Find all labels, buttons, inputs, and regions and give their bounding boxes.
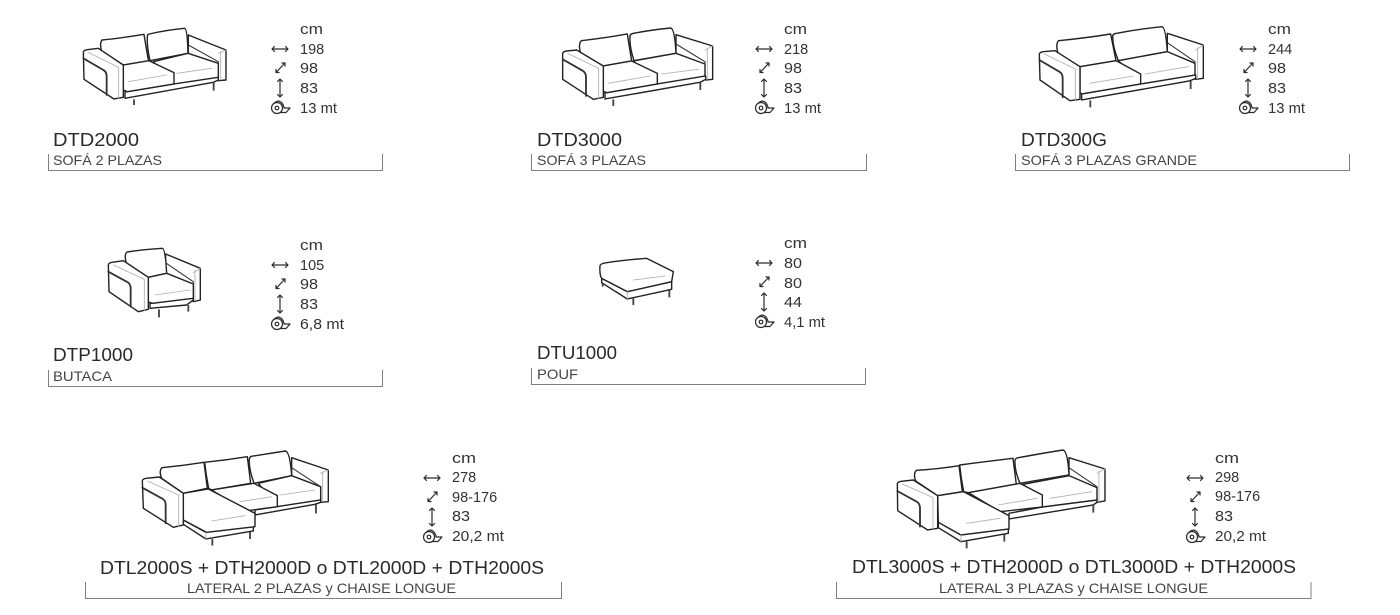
icon: fabric roll: [756, 315, 774, 328]
dimensions: 105: [300, 258, 324, 274]
dimensions: 98: [300, 61, 318, 77]
icon: fabric roll: [424, 530, 442, 542]
dimensions: 98: [1268, 61, 1286, 77]
product: lateral 2 plazas with chaise longue: [86, 451, 562, 598]
sectional sofa illustration: 3 seats and chaise: [897, 450, 1105, 548]
dimensions: 244: [1268, 42, 1292, 58]
sofa illustration: 3 large seats: [1039, 27, 1203, 107]
sectional sofa illustration: 2 seats and chaise: [142, 451, 328, 546]
bracket and description: LATERAL 3 PLAZAS y CHAISE LONGUE: [939, 580, 1208, 596]
bracket and description: [1016, 152, 1350, 170]
dimensions: 83: [300, 297, 318, 313]
dimensions: 20,2 mt: [1215, 529, 1266, 545]
dimensions: 13 mt: [300, 101, 337, 117]
dimensions: 44: [784, 295, 802, 311]
pouf illustration: [600, 258, 673, 305]
icon: depth arrow: [276, 279, 285, 288]
armchair illustration: [108, 248, 200, 317]
icon: fabric roll: [272, 101, 290, 114]
dimensions: cm: [300, 22, 323, 38]
icon: height arrow: [1246, 79, 1250, 97]
dimensions: [272, 238, 344, 333]
bracket and description: BUTACA: [53, 368, 113, 384]
product: lateral 3 plazas with chaise longue: [836, 450, 1311, 598]
icon: depth arrow: [760, 63, 769, 72]
icon: width arrow: [272, 262, 288, 268]
bracket and description: [532, 152, 866, 170]
icon: width arrow: [1240, 46, 1256, 52]
icon: fabric roll: [1186, 530, 1205, 542]
dimensions: [272, 22, 337, 117]
bracket and description: [836, 580, 1311, 598]
dimensions: 80: [784, 256, 802, 272]
icon: fabric roll: [756, 101, 774, 114]
bracket and description: [48, 152, 382, 170]
icon: width arrow: [756, 46, 772, 52]
dimensions: cm: [784, 236, 807, 252]
product: DTU1000: [532, 236, 866, 384]
dimensions: cm: [1268, 22, 1291, 38]
model code: DTD2000: [53, 129, 139, 150]
bracket and description: SOFÁ 3 PLAZAS: [537, 152, 646, 168]
icon: depth arrow: [428, 492, 437, 502]
dimensions: 98: [300, 277, 318, 293]
bracket and description: [48, 368, 382, 386]
product: DTP1000: [48, 238, 382, 386]
icon: depth arrow: [760, 277, 769, 286]
dimensions: 83: [300, 81, 318, 97]
dimensions: 4,1 mt: [784, 315, 825, 331]
icon: height arrow: [278, 295, 282, 313]
bracket and description: POUF: [537, 366, 578, 382]
sofa illustration: 2 seats: [83, 28, 226, 105]
dimensions: [756, 22, 821, 117]
icon: width arrow: [756, 260, 772, 266]
dimensions: cm: [784, 22, 807, 38]
dimensions: 80: [784, 276, 802, 292]
model code: DTU1000: [537, 342, 617, 363]
dimensions: 6,8 mt: [300, 317, 344, 333]
dimensions: 198: [300, 42, 324, 58]
icon: depth arrow: [276, 63, 285, 72]
dimensions: 218: [784, 42, 808, 58]
bracket and description: [86, 580, 562, 598]
icon: fabric roll: [272, 317, 290, 330]
icon: fabric roll: [1240, 101, 1258, 114]
icon: height arrow: [430, 508, 434, 526]
icon: depth arrow: [1244, 63, 1253, 72]
dimensions: 83: [784, 81, 802, 97]
dimensions: [424, 451, 504, 545]
dimensions: cm: [1215, 451, 1239, 467]
dimensions: 98: [784, 61, 802, 77]
dimensions: cm: [300, 238, 323, 254]
dimensions: cm: [452, 451, 476, 467]
dimensions: [1240, 22, 1305, 117]
model code: DTD300G: [1021, 129, 1107, 150]
model code: DTL3000S + DTH2000D o DTL3000D + DTH2000S: [852, 556, 1296, 577]
product: DTD3000: [532, 22, 866, 170]
bracket and description: LATERAL 2 PLAZAS y CHAISE LONGUE: [187, 580, 456, 596]
icon: width arrow: [272, 46, 288, 52]
icon: height arrow: [278, 79, 282, 97]
dimensions: 83: [1215, 509, 1233, 525]
dimensions: 83: [452, 509, 470, 525]
bracket and description: SOFÁ 2 PLAZAS: [53, 152, 162, 168]
icon: height arrow: [762, 79, 766, 97]
model code: DTD3000: [537, 129, 622, 150]
dimensions: 98-176: [1215, 489, 1260, 505]
product: DTD300G: [1016, 22, 1350, 170]
dimensions: 278: [452, 470, 476, 486]
dimensions: 20,2 mt: [452, 529, 504, 545]
dimensions: 83: [1268, 81, 1286, 97]
dimensions: [1186, 451, 1266, 545]
model code: DTP1000: [53, 344, 133, 365]
dimensions: 298: [1215, 470, 1239, 486]
icon: width arrow: [1187, 476, 1203, 480]
dimensions: 13 mt: [1268, 101, 1305, 117]
bracket and description: [532, 366, 866, 384]
sofa illustration: 3 seats: [563, 28, 713, 106]
dimensions: 13 mt: [784, 101, 821, 117]
icon: height arrow: [762, 293, 766, 311]
icon: height arrow: [1192, 508, 1198, 526]
dimensions: [756, 236, 825, 331]
dimensions: 98-176: [452, 490, 497, 506]
bracket and description: SOFÁ 3 PLAZAS GRANDE: [1021, 152, 1197, 168]
model code: DTL2000S + DTH2000D o DTL2000D + DTH2000S: [100, 557, 544, 578]
icon: depth arrow: [1191, 492, 1200, 502]
product: DTD2000: [48, 22, 382, 170]
icon: width arrow: [424, 476, 440, 480]
